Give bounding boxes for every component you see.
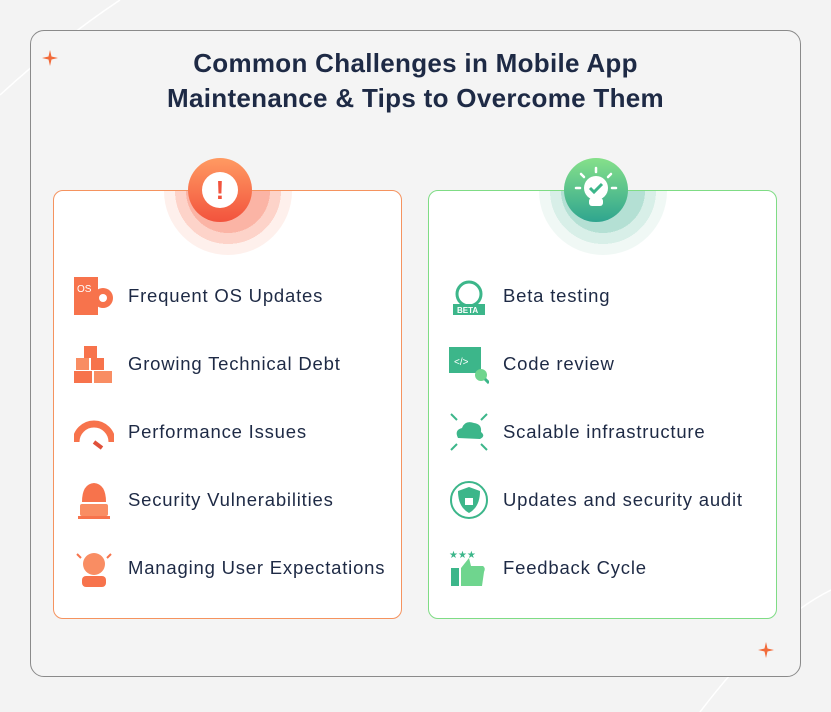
panel: challenges <box>53 190 402 619</box>
item: Managing User Expectations <box>76 553 385 587</box>
item: Feedback Cycle <box>449 550 647 586</box>
item: Updates and security audit <box>450 481 743 519</box>
item: Feedback Cycle: ★★★ <box>449 550 476 561</box>
item: Managing User Expectations: Managing User Expectations <box>128 557 385 578</box>
item: Frequent OS Updates: OS <box>77 284 92 295</box>
sparkle bottom-right <box>758 642 774 658</box>
item: Frequent OS Updates <box>74 277 323 315</box>
item: Code review: Code review <box>503 353 615 374</box>
item: Code review <box>449 347 615 384</box>
item: Scalable infrastructure <box>450 413 705 451</box>
item: Feedback Cycle: Feedback Cycle <box>503 557 647 578</box>
badge: lightbulb <box>564 158 628 222</box>
sparkle top-left <box>42 50 58 66</box>
title: Common Challenges in Mobile App <box>193 48 638 78</box>
item: Performance Issues: Performance Issues <box>128 421 307 442</box>
title: Maintenance & Tips to Overcome Them <box>167 83 664 113</box>
item: Security Vulnerabilities <box>78 483 334 519</box>
item: Scalable infrastructure: Scalable infrastructure <box>503 421 705 442</box>
panel: tips <box>428 190 777 619</box>
item: Growing Technical Debt <box>74 346 341 383</box>
item: Performance Issues <box>74 420 307 450</box>
title <box>167 48 664 113</box>
item: Updates and security audit: Updates and security audit <box>503 489 743 510</box>
item: Growing Technical Debt: Growing Technical Debt <box>128 353 341 374</box>
item: Beta testing <box>453 280 610 315</box>
badge: warning <box>188 158 252 222</box>
item: Beta testing: Beta testing <box>503 285 610 306</box>
badge: warning: ! <box>216 175 224 205</box>
item: Security Vulnerabilities: Security Vulnerabilities <box>128 489 334 510</box>
item: Beta testing: BETA <box>457 306 478 315</box>
item: Code review: </> <box>454 357 469 368</box>
item: Frequent OS Updates: Frequent OS Updates <box>128 285 323 306</box>
